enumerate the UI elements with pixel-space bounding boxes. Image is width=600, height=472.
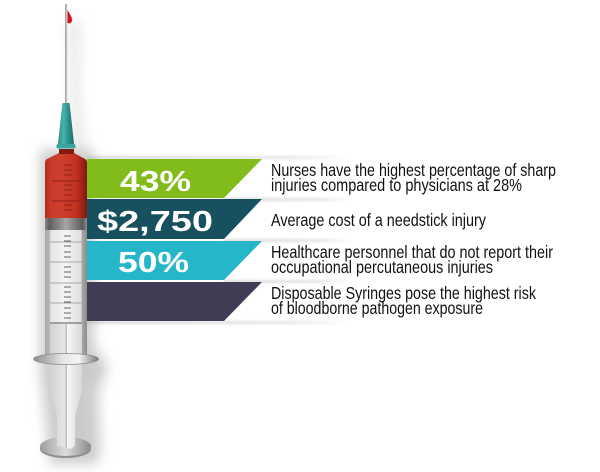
needle (65, 4, 68, 103)
band: 43% (87, 159, 262, 198)
icon: blood drop (68, 10, 72, 23)
syringe illustration (34, 4, 98, 458)
text: healthcare personnel: occupational percutaneous injuries (271, 257, 493, 277)
band: 50% (87, 241, 262, 280)
text: nurses: injuries compared to physicians at 28% (271, 175, 522, 195)
text: average cost: Average cost of a needstick injury (271, 210, 486, 230)
band: disposable syringes (87, 282, 262, 321)
stat: $2,750: $2,750 (97, 206, 213, 238)
plunger rod (50, 362, 82, 449)
red barrel (45, 149, 87, 218)
syringe shadow (40, 20, 108, 464)
grey collar (45, 218, 87, 230)
band: $2,750 (87, 199, 262, 239)
finger flange (34, 354, 98, 364)
text: disposable syringes: of bloodborne pathogen exposure (271, 298, 483, 318)
teal needle hub (56, 103, 76, 148)
band shadows (87, 156, 352, 324)
stat: 43%: 43% (120, 166, 191, 198)
plunger base disk (40, 437, 91, 458)
stat: 50%: 50% (118, 247, 189, 279)
glass barrel (45, 230, 87, 358)
text: disposable syringes: Disposable Syringes pose the highest risk (271, 283, 536, 303)
